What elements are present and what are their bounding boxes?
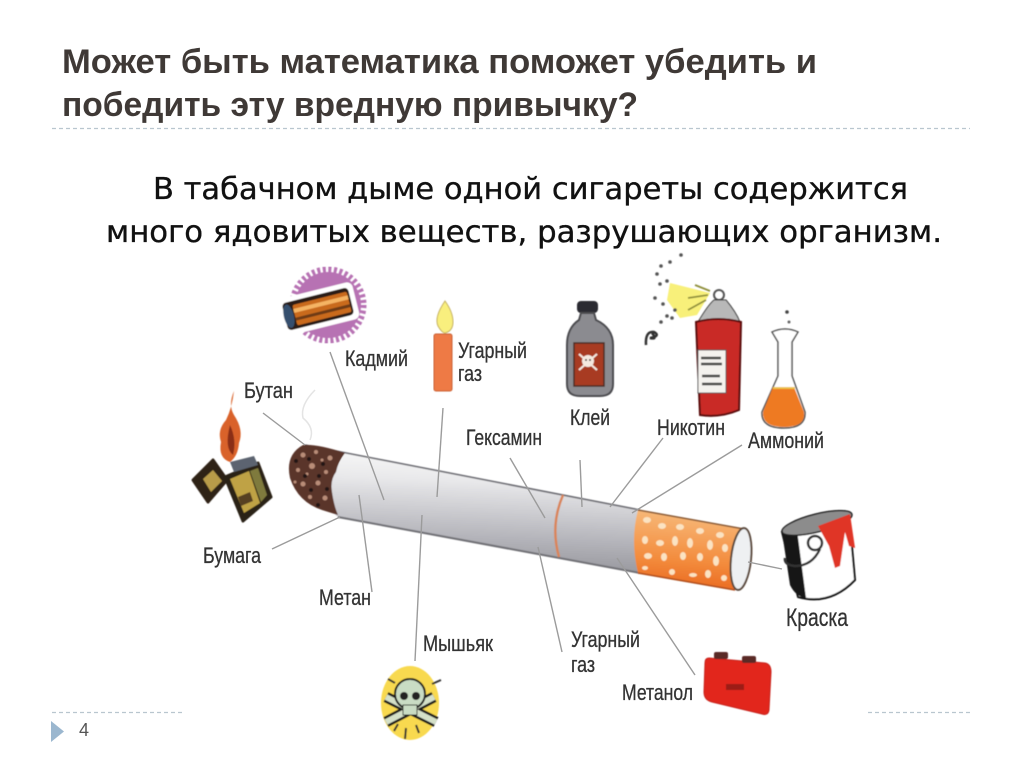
icon: lighter	[193, 391, 271, 521]
icon: glue bottle	[567, 301, 613, 396]
leader lines	[263, 352, 782, 675]
tobacco end	[289, 445, 345, 515]
red band	[555, 495, 563, 557]
title	[62, 43, 817, 124]
labels: Краска	[786, 604, 848, 632]
labels: Мышьяк	[423, 631, 493, 656]
body text	[106, 172, 942, 250]
filter	[634, 510, 744, 590]
labels: газ	[458, 361, 482, 386]
labels: Никотин	[657, 415, 725, 440]
icon: gas canister	[704, 652, 771, 714]
labels: Бутан	[244, 378, 293, 403]
body text: много ядовитых веществ, разрушающих организм.	[106, 215, 942, 250]
icon: cadmium battery	[276, 270, 363, 340]
body text: В табачном дыме одной сигареты содержится	[153, 172, 908, 207]
icon: flask	[762, 310, 805, 428]
title: победить эту вредную привычку?	[62, 86, 638, 124]
icon: skull and bones	[381, 666, 441, 740]
smoke	[302, 390, 315, 440]
labels: Угарный	[571, 627, 640, 652]
spray mist	[667, 283, 710, 318]
icon: paint can	[780, 506, 855, 599]
labels: Кадмий	[345, 346, 408, 371]
page number: 4	[79, 720, 89, 740]
labels	[203, 338, 848, 705]
icon: spray can	[646, 253, 741, 416]
labels: Метанол	[622, 680, 693, 705]
labels: Клей	[570, 405, 610, 430]
labels: Угарный	[458, 338, 527, 363]
labels: Аммоний	[748, 428, 824, 453]
filter end	[728, 527, 754, 591]
labels: Гексамин	[466, 425, 542, 450]
icon: footer arrow	[51, 721, 64, 742]
cigarette	[289, 445, 754, 591]
fly	[646, 332, 657, 345]
title: Может быть математика поможет убедить и	[62, 43, 817, 81]
icon: candle	[434, 301, 453, 391]
labels: Метан	[319, 585, 371, 610]
labels: газ	[571, 652, 595, 677]
labels: Бумага	[203, 543, 261, 568]
cigarette paper	[326, 453, 640, 573]
